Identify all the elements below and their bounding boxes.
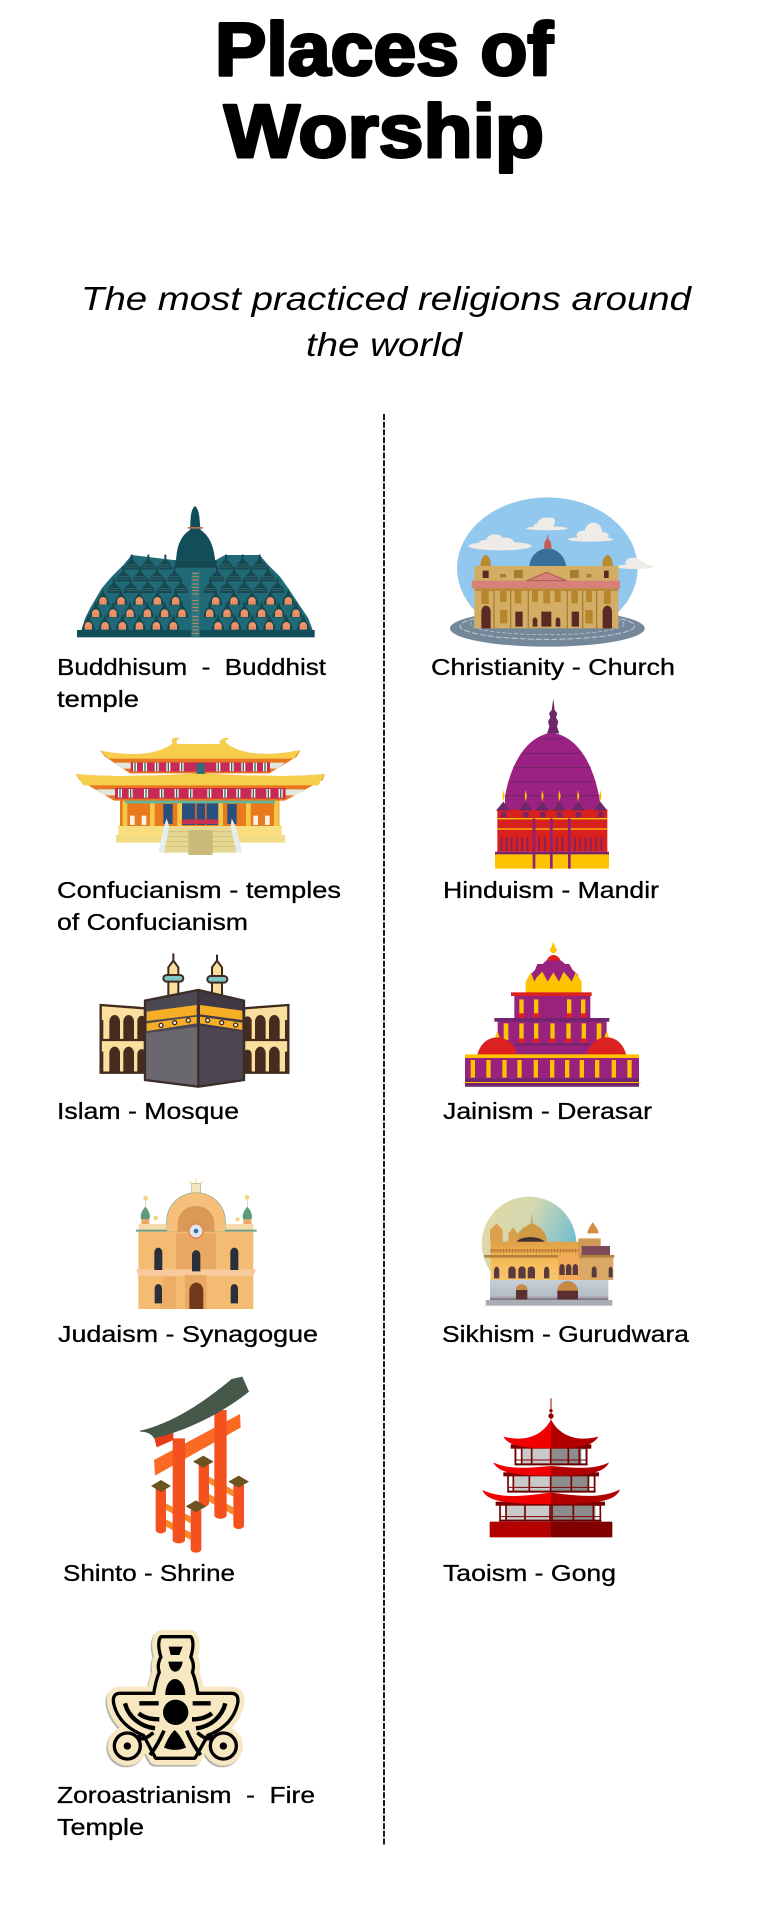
icon: church [450,497,654,647]
label: Buddhism [57,654,327,712]
panel: Shinto [63,1377,249,1586]
label: Confucianism: of Confucianism [57,909,248,935]
icon: derasar [463,942,641,1087]
panel: Taoism [443,1398,620,1586]
label: Judaism: Judaism - Synagogue [58,1321,318,1347]
label: Buddhism: temple [57,686,139,712]
panel: Jainism [443,942,652,1124]
icon: temple of Confucianism [76,738,325,855]
icon: synagogue [136,1179,257,1309]
label: Jainism: Jainism - Derasar [443,1098,652,1124]
panel: Confucianism [57,738,341,935]
title: Places of [215,7,554,91]
label: Sikhism: Sikhism - Gurudwara [442,1321,689,1347]
panel: Hinduism [443,698,659,903]
label: Buddhism: Buddhisum - Buddhist [57,654,327,680]
panel: Zoroastrianism [57,1638,315,1840]
subtitle: the world [306,326,464,363]
label: Zoroastrianism: Temple [57,1814,144,1840]
label: Confucianism [57,877,341,935]
icon: faravahar [114,1638,236,1759]
subtitle [81,280,693,363]
title: Worship [224,89,544,173]
column divider [383,414,385,1845]
title [215,7,554,173]
label: Confucianism: Confucianism - temples [57,877,341,903]
label: Christianity: Christianity - Church [431,654,675,680]
label: Taoism: Taoism - Gong [443,1560,616,1586]
icon: shrine gate [140,1377,249,1553]
panel: Buddhism [57,506,327,712]
icon: Buddhist temple [77,506,315,637]
icon: mandir [495,698,609,869]
icon: mosque [101,953,288,1087]
panel: Christianity [431,497,675,680]
label: Shinto: Shinto - Shrine [63,1560,235,1586]
label: Zoroastrianism [57,1782,315,1840]
panel: Judaism [58,1179,318,1347]
panel: Islam [57,953,288,1124]
label: Zoroastrianism: Zoroastrianism - Fire [57,1782,315,1808]
panel: Sikhism [442,1197,689,1347]
icon: gong pagoda [482,1398,620,1537]
icon: gurudwara [482,1197,614,1306]
label: Islam: Islam - Mosque [57,1098,239,1124]
subtitle: The most practiced religions around [81,280,693,317]
label: Hinduism: Hinduism - Mandir [443,877,659,903]
